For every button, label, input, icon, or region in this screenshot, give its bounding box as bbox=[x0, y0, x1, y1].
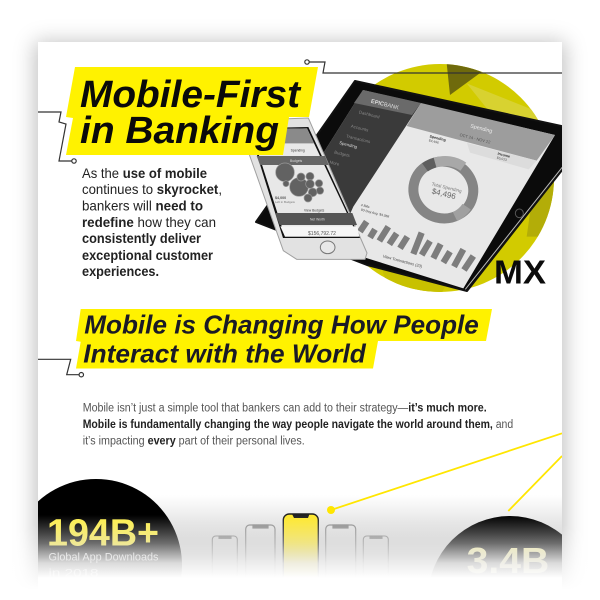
tablet screen: Dashboard bbox=[358, 109, 381, 120]
donut chart bbox=[407, 155, 479, 225]
phone bubble chart bbox=[276, 163, 324, 202]
phone home button bbox=[320, 241, 335, 254]
paragraph: Mobile isn’t just a simple tool that bankers can add to their strategy—it’s much more. bbox=[83, 403, 487, 415]
intro text: exceptional customer bbox=[82, 247, 214, 263]
section heading banner: Interact with the World bbox=[83, 339, 367, 369]
tablet view transactions label: View Transactions (33) bbox=[382, 253, 423, 269]
tablet screen: Transactions bbox=[346, 133, 371, 144]
title banner: Mobile-First bbox=[80, 74, 301, 116]
phone screen bbox=[249, 127, 360, 238]
stat circle: right: 3.4B bbox=[467, 540, 549, 581]
phone screen: Spending bbox=[291, 148, 305, 152]
connector: top right bbox=[305, 60, 562, 73]
tablet home button bbox=[515, 209, 523, 218]
connector: title left bbox=[38, 112, 76, 163]
intro text: bankers will need to bbox=[82, 198, 203, 214]
tablet screen: Accounts bbox=[350, 123, 369, 133]
intro text: consistently deliver bbox=[82, 230, 202, 246]
phone row illustration bbox=[212, 513, 389, 570]
phone outline far left bbox=[212, 536, 238, 562]
intro text: experiences. bbox=[82, 263, 159, 279]
tablet screen: OCT 24 - NOV 22 bbox=[459, 132, 492, 145]
phone screen: View Budgets bbox=[304, 208, 325, 212]
stat circle: app downloads: 194B+ bbox=[47, 512, 159, 554]
phone screen: $4,000 bbox=[275, 196, 286, 200]
tablet screen: More bbox=[329, 159, 340, 167]
phone screen: $156,792.72 bbox=[308, 231, 336, 237]
phone screen: Net Worth bbox=[310, 218, 325, 222]
hero: tablet and phone illustration bbox=[237, 60, 566, 297]
paragraph: it’s impacting every part of their personal lives. bbox=[83, 435, 305, 447]
phone yellow center bbox=[282, 513, 319, 570]
tablet screen: Spending bbox=[470, 123, 493, 135]
tablet edge highlight bbox=[465, 165, 564, 289]
yellow photo circle bbox=[368, 64, 554, 292]
title banner bbox=[66, 67, 318, 155]
tablet body bbox=[256, 81, 566, 291]
phone screen: Budgets bbox=[290, 159, 303, 163]
tablet screen: $5,023 bbox=[496, 156, 507, 162]
stat circle: app downloads: in 2018 bbox=[48, 568, 98, 580]
MX logo: MX bbox=[494, 254, 546, 291]
yellow connector lines bbox=[327, 433, 562, 514]
tablet screen: Income bbox=[497, 152, 510, 159]
tablet screen: Budgets bbox=[334, 149, 350, 158]
paragraph bbox=[83, 403, 513, 447]
donut chart: $4,496 bbox=[431, 187, 457, 201]
title banner: in Banking bbox=[80, 110, 279, 152]
tablet screen bbox=[275, 90, 555, 288]
bar chart bbox=[360, 222, 473, 270]
phone outline left bbox=[245, 524, 276, 562]
intro text: redefine how they can bbox=[82, 214, 216, 230]
paragraph: Mobile is fundamentally changing the way people navigate the world around them, and bbox=[83, 419, 513, 431]
intro text bbox=[82, 165, 222, 279]
phone body bbox=[237, 118, 367, 259]
stat circle: app downloads: Global App Downloads bbox=[48, 552, 159, 564]
section heading banner bbox=[76, 309, 492, 369]
tablet screen: Spending bbox=[339, 140, 358, 150]
stat circle: right bbox=[433, 516, 562, 571]
phone outline far right bbox=[362, 536, 389, 562]
intro text: As the use of mobile bbox=[82, 165, 207, 181]
tablet screen: 90-Day Avg. $4,068 bbox=[360, 208, 390, 219]
section heading banner: Mobile is Changing How People bbox=[84, 309, 479, 339]
connector: section heading bbox=[38, 359, 84, 377]
donut chart: Total Spending bbox=[431, 181, 463, 194]
stat circle: app downloads bbox=[38, 479, 182, 571]
phone screen: Left in Budgets bbox=[275, 200, 295, 204]
tablet screen: Spending bbox=[429, 134, 446, 142]
tablet screen: EPICBANK bbox=[370, 99, 400, 112]
tablet screen: $4,496 bbox=[428, 138, 439, 145]
phone outline right bbox=[325, 524, 356, 562]
tablet screen: 4 Bills bbox=[360, 203, 370, 209]
intro text: continues to skyrocket, bbox=[82, 181, 222, 197]
